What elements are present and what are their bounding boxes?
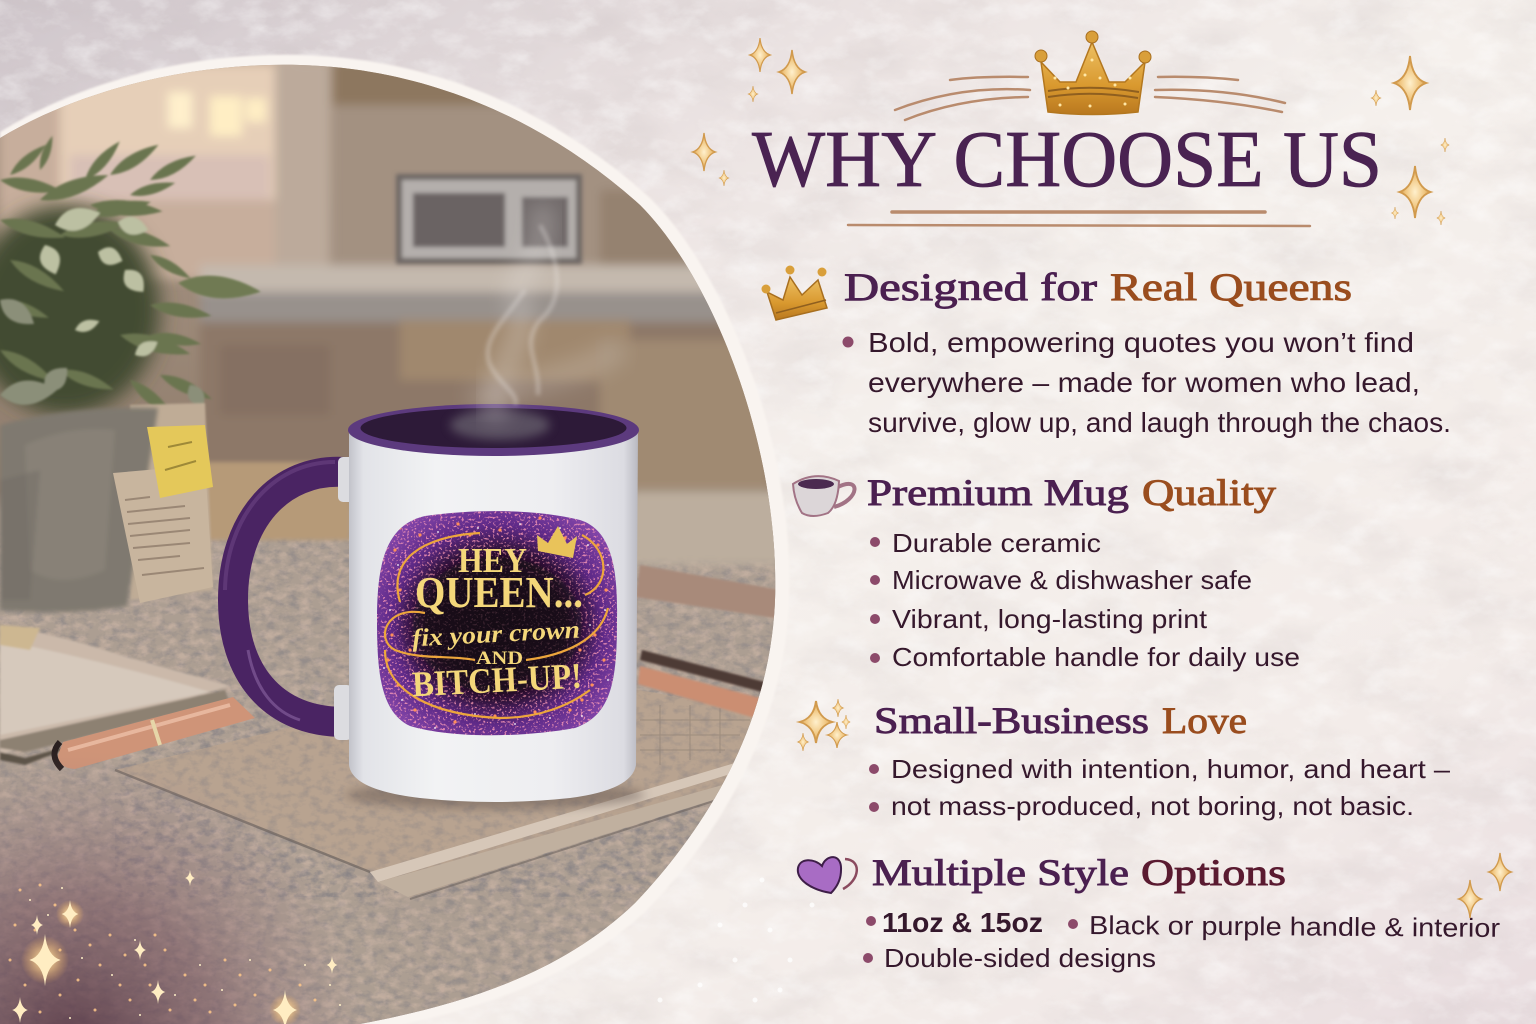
mug handle bbox=[225, 457, 354, 740]
bullet text: Bold, empowering quotes you won’t find bbox=[868, 327, 1414, 358]
title crown bbox=[1035, 31, 1151, 114]
icon: hearts bbox=[798, 857, 857, 893]
white arc border of photo bbox=[0, 55, 789, 1024]
bullet list: Microwave & dishwasher safe bbox=[892, 565, 1252, 595]
heading: Premium Mug bbox=[867, 473, 1129, 514]
heading bbox=[872, 853, 1286, 894]
bullet list: Comfortable handle for daily use bbox=[892, 642, 1300, 672]
heading: Designed for bbox=[844, 266, 1097, 309]
title: WHY CHOOSE US bbox=[752, 116, 1382, 204]
bullet list bbox=[870, 528, 1300, 672]
bullet text: everywhere – made for women who lead, bbox=[868, 367, 1420, 398]
mug print: Hey Queen bbox=[377, 511, 618, 736]
bullet list: Designed with intention, humor, and heart – bbox=[891, 754, 1451, 784]
mug print: Hey Queen: AND bbox=[476, 648, 523, 669]
mug print: Hey Queen: HEY bbox=[458, 541, 527, 580]
icon: crown bbox=[762, 266, 827, 320]
photo panel: mug on desk bbox=[0, 0, 802, 1024]
crown flourishes bbox=[895, 77, 1285, 120]
handwritten note bbox=[113, 465, 213, 603]
bullet list: Durable ceramic bbox=[892, 528, 1101, 558]
bullet list: not mass-produced, not boring, not basic. bbox=[891, 791, 1414, 821]
heading bbox=[874, 701, 1247, 742]
papers under mug bbox=[115, 690, 757, 899]
icon: mug bbox=[793, 476, 855, 516]
mug shadow bbox=[345, 781, 645, 809]
heading: Multiple Style bbox=[872, 853, 1129, 894]
section: Designed for Real Queens bbox=[762, 266, 1451, 438]
mug print: Hey Queen: fix your crown bbox=[411, 617, 581, 652]
cardboard behind pot bbox=[130, 403, 213, 600]
mug print: Hey Queen: QUEEN... bbox=[415, 568, 583, 617]
orange pen bbox=[54, 697, 255, 769]
bottom left glitter bbox=[0, 791, 341, 1024]
bullet list: Vibrant, long-lasting print bbox=[892, 604, 1208, 634]
heading: Love bbox=[1162, 701, 1247, 742]
bullet list bbox=[869, 754, 1451, 821]
heading bbox=[844, 266, 1352, 309]
mug crown bbox=[537, 526, 577, 558]
section: Small-Business Love bbox=[798, 699, 1451, 821]
options text: Black or purple handle & interior bbox=[1089, 910, 1501, 943]
title underlines bbox=[848, 212, 1310, 226]
icon: sparkles bbox=[798, 699, 850, 751]
right pens and book bbox=[636, 565, 780, 718]
heading: Options bbox=[1141, 853, 1286, 894]
yellow sticky note bbox=[147, 425, 213, 498]
options text bbox=[863, 907, 1501, 973]
section: Premium Mug Quality bbox=[793, 473, 1300, 672]
options text: Double-sided designs bbox=[884, 943, 1156, 973]
gold sparkles around title bbox=[693, 38, 1449, 225]
mug print: Hey Queen: BITCH-UP! bbox=[411, 656, 583, 704]
blurred window background bbox=[0, 50, 802, 492]
bullet text bbox=[842, 327, 1451, 438]
heading bbox=[867, 473, 1277, 514]
bullet text: survive, glow up, and laugh through the chaos. bbox=[868, 407, 1451, 438]
plant bbox=[0, 134, 262, 421]
section: Multiple Style Options bbox=[798, 853, 1511, 973]
AC window unit bbox=[396, 174, 582, 264]
options text: 11oz & 15oz bbox=[882, 907, 1043, 938]
notebook bbox=[0, 625, 230, 765]
heading: Quality bbox=[1142, 473, 1277, 514]
sparkles bottom right bbox=[1459, 853, 1511, 918]
desk surface bbox=[0, 462, 800, 1024]
concrete pot bbox=[0, 408, 158, 612]
mug body bbox=[348, 404, 639, 802]
heading: Real Queens bbox=[1110, 266, 1352, 309]
steam bbox=[470, 205, 620, 420]
heading: Small-Business bbox=[874, 701, 1149, 742]
